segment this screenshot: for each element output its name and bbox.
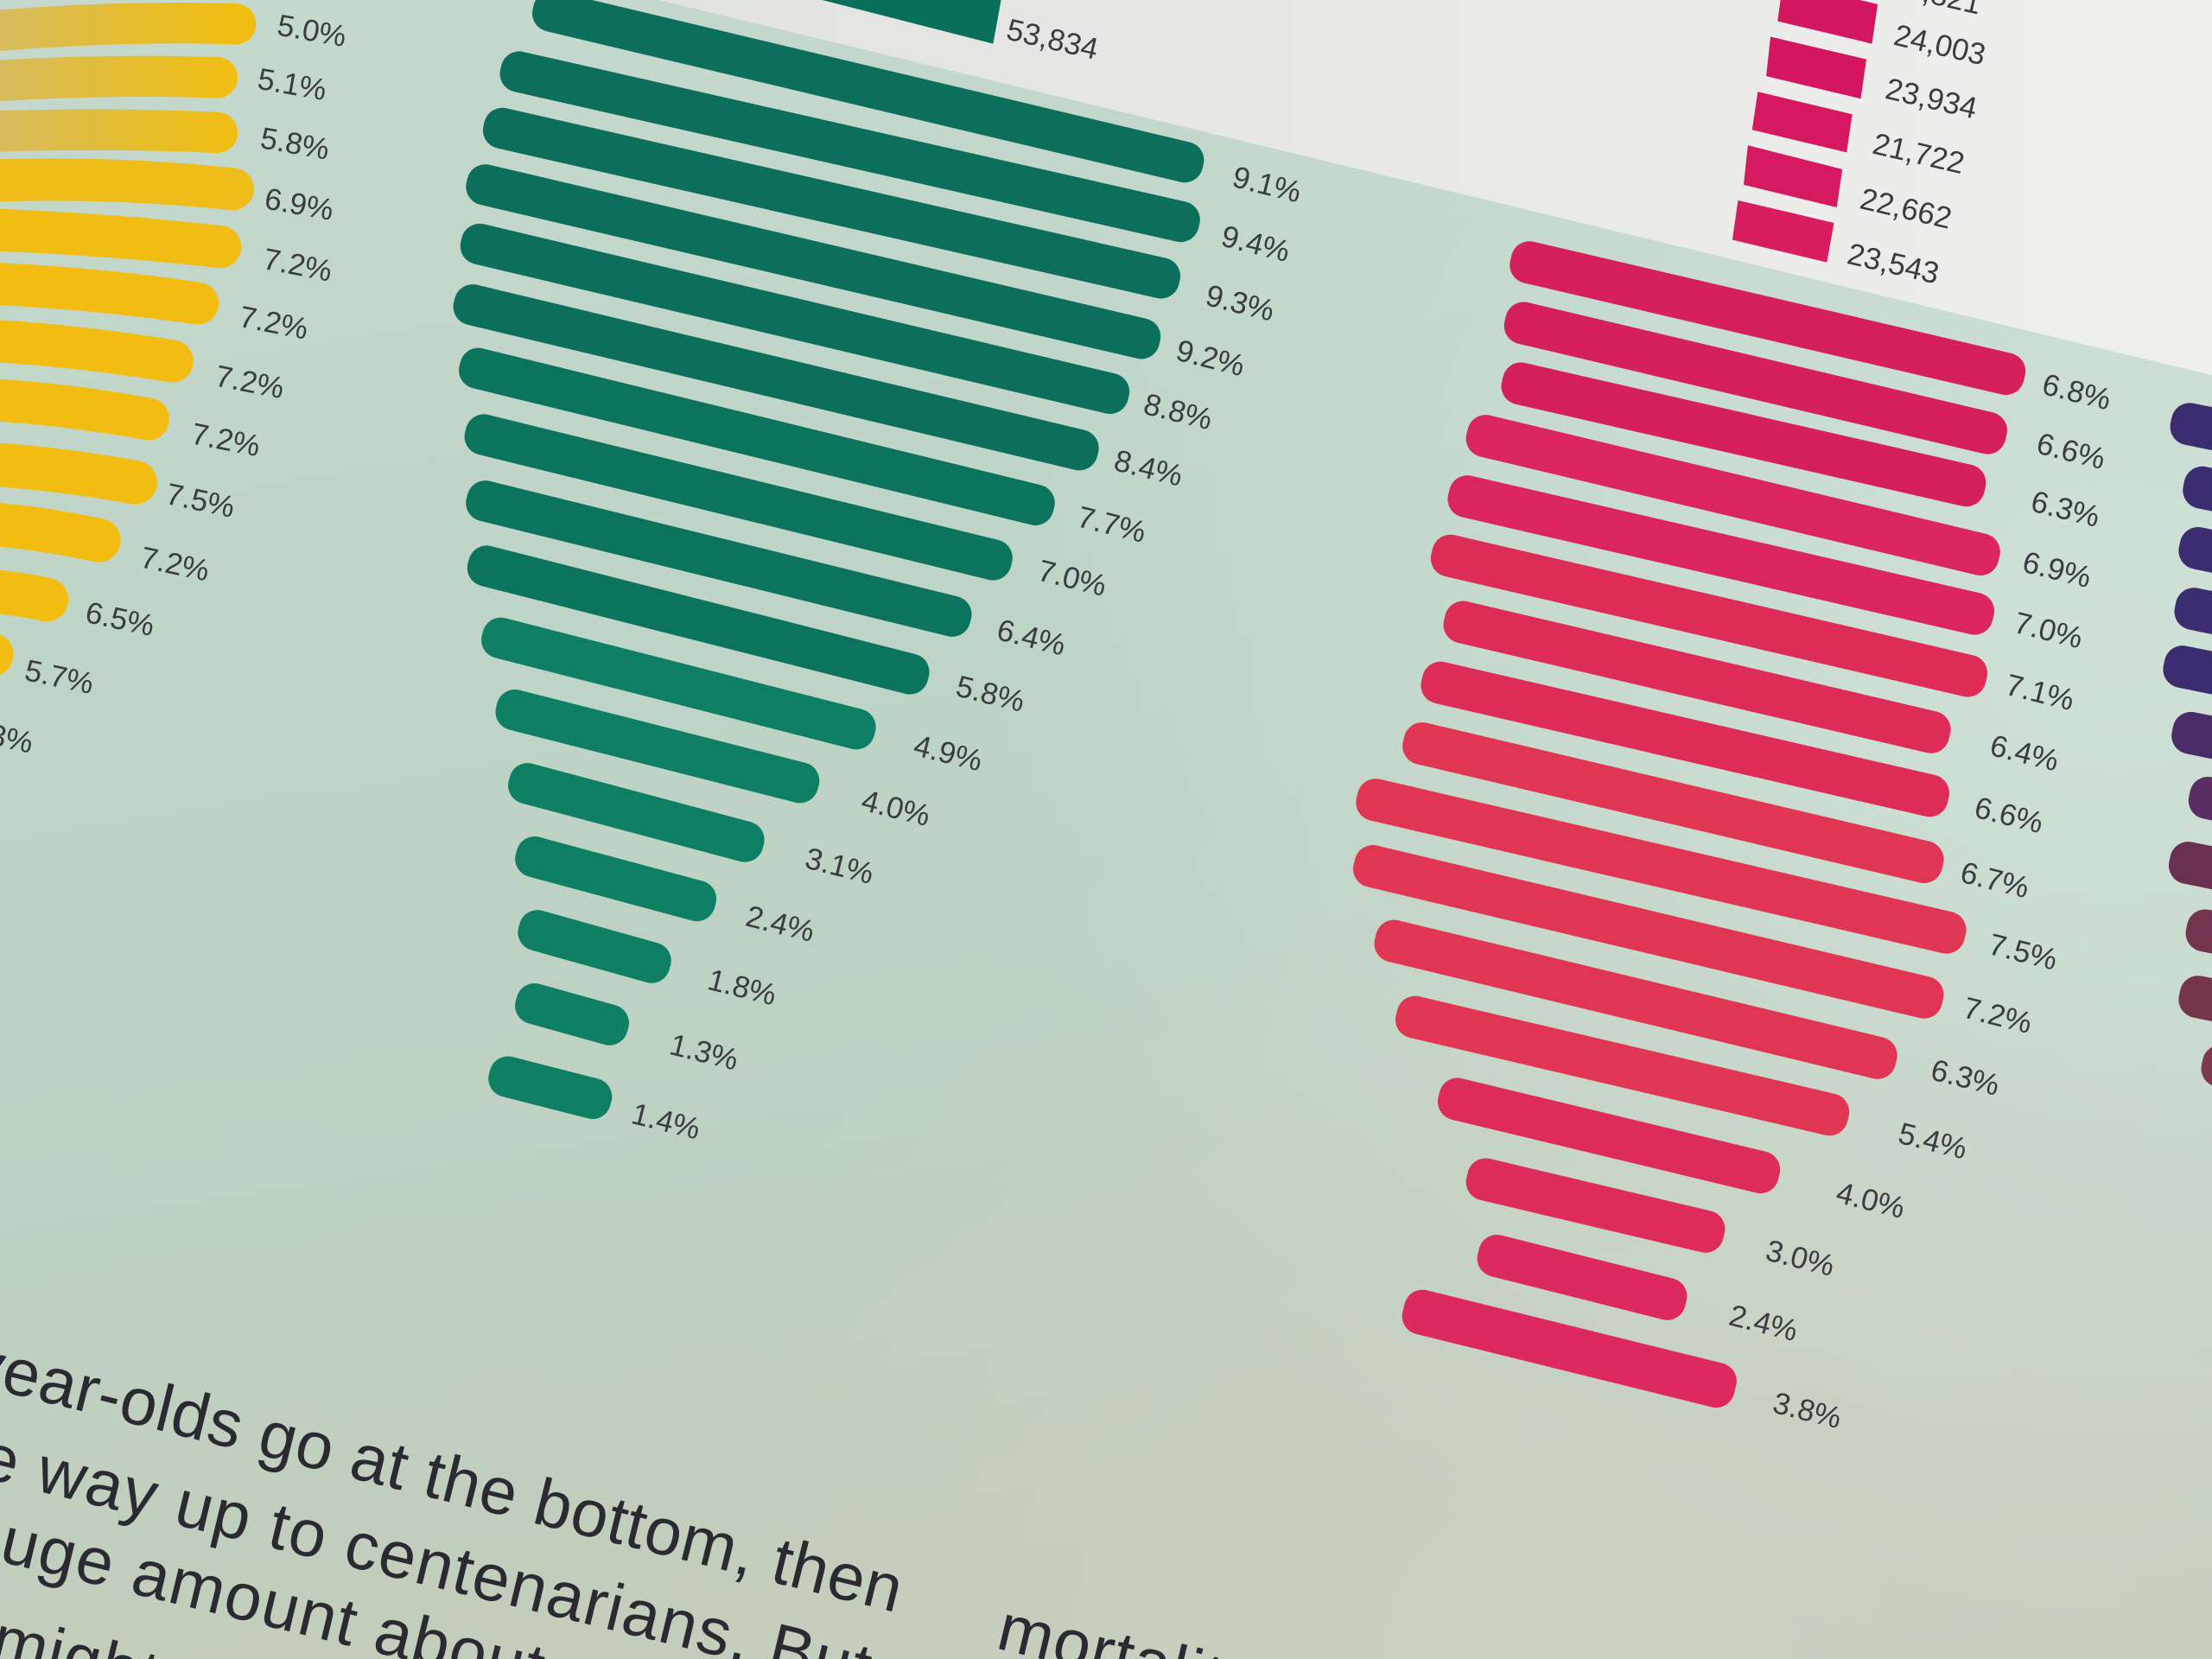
upper pink bars with values: 21,722 [1870,127,1967,181]
pink value labels: 3.0% [1763,1234,1838,1283]
pink bars [1350,238,2029,1412]
green value labels: 1.8% [704,963,779,1012]
pink value labels: 7.1% [2002,668,2077,717]
green value labels: 9.1% [1230,160,1305,209]
pink value labels: 6.6% [2033,427,2108,476]
pink value labels: 4.0% [1833,1176,1908,1225]
pink value labels: 5.4% [1895,1116,1970,1166]
green value labels: 3.1% [802,842,877,891]
upper pink bars with values [1732,0,1989,290]
upper green bar with value [811,0,1102,67]
pink value labels: 2.4% [1726,1299,1801,1348]
green value labels: 6.4% [994,613,1069,663]
yellow value labels: 7.2% [261,242,334,289]
chart: green age bars [449,0,1305,1147]
green value labels: 2.4% [742,899,817,949]
yellow value labels: 7.5% [163,477,238,524]
green value labels: 1.3% [666,1027,741,1077]
yellow bars [0,23,236,655]
pink value labels: 6.4% [1986,728,2062,778]
yellow value labels [0,9,349,760]
green value labels: 9.3% [1203,278,1278,328]
pink value labels: 3.8% [1770,1386,1845,1435]
pink value labels: 7.2% [1960,991,2035,1040]
chart: purple age bars [2160,400,2212,1116]
yellow value labels: 7.2% [213,359,287,405]
chart: yellow age bars [0,9,349,760]
yellow value labels: 5.8% [257,121,332,167]
green value labels: 7.7% [1074,500,1149,550]
yellow value labels: 5.7% [22,653,97,701]
green value labels: 1.4% [628,1096,703,1147]
chart: pink age bars [1350,238,2114,1435]
upper pink bars with values: 24,003 [1891,18,1989,72]
yellow value labels: 7.2% [237,300,311,346]
pink value labels: 7.5% [1986,927,2061,977]
pink value labels: 6.3% [1928,1053,2003,1103]
green value labels: 4.9% [911,728,986,778]
green value labels: 9.2% [1173,334,1248,383]
white upper page [658,0,2212,375]
upper pink bars with values: 22,662 [1857,182,1955,236]
yellow value labels: 7.2% [137,541,213,588]
green value labels: 8.4% [1110,443,1186,493]
pink value labels: 7.0% [2011,606,2086,655]
yellow value labels: 6.9% [262,182,336,227]
green value labels [628,160,1305,1147]
upper pink bars with values: 23,543 [1844,237,1942,290]
pink value labels: 6.7% [1957,855,2032,905]
green bars [449,0,1208,1123]
yellow value labels: 5.1% [255,62,329,107]
green value labels: 8.8% [1141,387,1216,436]
upper pink bars with values: 23,934 [1882,72,1980,125]
pink value labels: 6.6% [1971,791,2046,840]
yellow value labels: 5.0% [275,9,349,54]
yellow value labels: 7.2% [188,417,263,463]
upper green bar with value: 53,834 [1003,13,1102,67]
green value labels: 5.8% [953,670,1028,719]
green value labels: 4.0% [858,784,933,833]
pink value labels: 6.3% [2028,485,2103,534]
green value labels: 9.4% [1218,219,1294,269]
pink value labels: 6.8% [2039,367,2114,416]
green value labels: 7.0% [1034,554,1109,603]
yellow value labels: 6.5% [83,595,157,643]
pink value labels [1726,367,2114,1435]
pink value labels: 6.9% [2019,545,2094,594]
